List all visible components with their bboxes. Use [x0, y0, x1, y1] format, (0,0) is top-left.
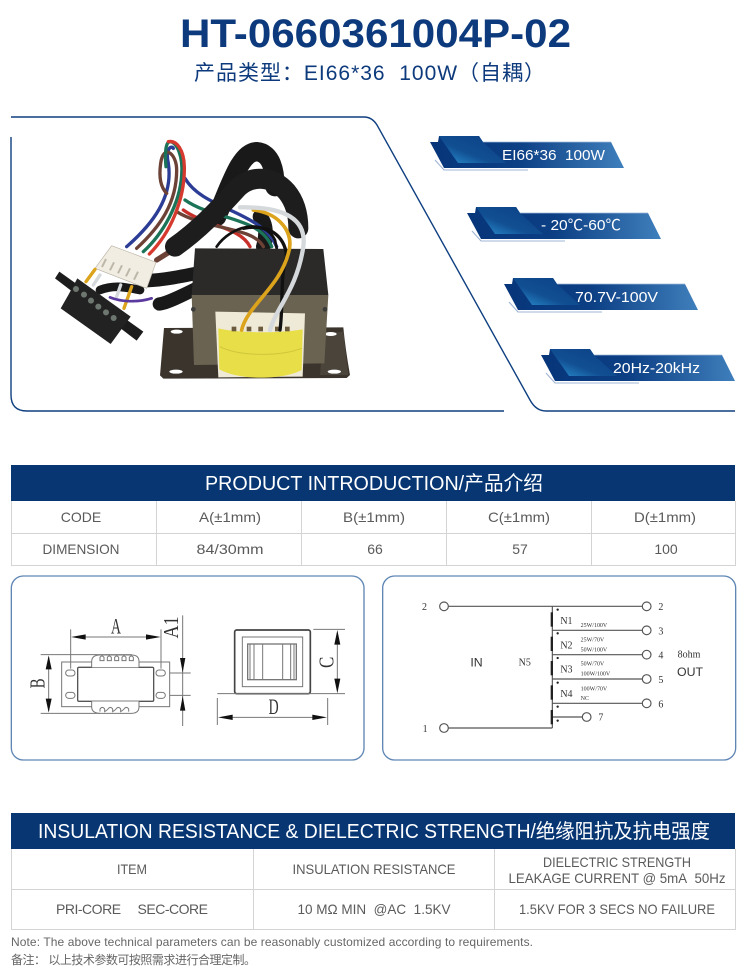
table row: headers: DIELECTRIC STRENGTH: [543, 854, 691, 870]
table row: values: 1.5KV FOR 3 SECS NO FAILURE: [519, 901, 715, 917]
title: HT-0660361004P-02: [180, 12, 571, 56]
schematic labels: N5: [519, 658, 531, 669]
schematic labels: N3: [560, 665, 573, 676]
table heading: [11, 813, 735, 849]
panel: dimension drawing: [11, 576, 364, 760]
product photo: transformer with wires: [55, 141, 350, 379]
schematic labels: 6: [658, 699, 663, 710]
table row: values: 10 MΩ MIN @AC 1.5KV: [298, 901, 451, 917]
table row: code: CODE: [61, 509, 101, 525]
schematic labels: N2: [560, 640, 573, 651]
schematic labels: 4: [658, 650, 663, 661]
spec tag: temperature: [467, 207, 661, 241]
note: Note: The above technical parameters can be reasonably customized according to requirements.: [11, 935, 533, 949]
schematic labels: 5: [658, 675, 663, 686]
table row: code: B(±1mm): [343, 509, 405, 525]
table row: dimension: 100: [654, 541, 678, 557]
schematic labels: 25W/100V: [581, 623, 608, 629]
icon: mounting plate: [160, 327, 350, 379]
table heading: INSULATION RESISTANCE & DIELECTRIC STRENGTH/绝缘阻抗及抗电强度: [38, 820, 710, 843]
insulation table: [11, 813, 736, 930]
icon: foam sleeves back: [100, 152, 275, 304]
top view drawing: A1: [161, 616, 183, 638]
schematic wires: [440, 602, 651, 732]
table row: headers: INSULATION RESISTANCE: [292, 861, 456, 877]
spec tag: frequency: 20Hz-20kHz: [613, 360, 700, 377]
top view drawing: B: [27, 678, 49, 688]
spec tag: EI66*36 100W: EI66*36 100W: [502, 147, 606, 164]
table heading: [11, 465, 735, 501]
icon: connector leads: [86, 269, 152, 308]
schematic labels: 100W/70V: [581, 686, 608, 692]
coil segments: [551, 608, 559, 724]
icon: coloured wires: [127, 141, 282, 273]
IN label: IN: [470, 655, 483, 669]
table row: headers: ITEM: [117, 861, 147, 877]
schematic labels: 3: [658, 626, 663, 637]
table row: dimension: [42, 541, 678, 557]
icon: foam sleeve front: [175, 179, 298, 247]
table heading: PRODUCT INTRODUCTION/产品介绍: [205, 472, 543, 495]
spec tag: temperature: - 20℃-60℃: [541, 217, 621, 234]
icon: white connector: [95, 246, 156, 288]
schematic labels: NC: [581, 696, 589, 702]
table row: dimension: 84/30mm: [196, 541, 264, 557]
schematic labels: 8ohm: [678, 649, 701, 660]
table row: headers: LEAKAGE CURRENT @ 5mA 50Hz: [508, 870, 726, 886]
table row: values: PRI-CORE SEC-CORE: [56, 901, 208, 917]
table row: values: [56, 901, 715, 917]
schematic labels: N4: [560, 689, 573, 700]
spec tag: voltage: [504, 278, 698, 312]
table row: dimension: 66: [367, 541, 383, 557]
OUT label: OUT: [677, 665, 703, 679]
table row: dimension: DIMENSION: [42, 541, 120, 557]
schematic labels: 7: [598, 713, 603, 724]
product introduction table: [11, 465, 736, 566]
table row: code: D(±1mm): [634, 509, 696, 525]
schematic labels: 2: [658, 602, 663, 613]
table row: code: A(±1mm): [199, 509, 261, 525]
schematic labels: 2: [422, 602, 427, 613]
icon: front wires: [240, 207, 304, 330]
spec tag: voltage: 70.7V-100V: [575, 289, 658, 306]
schematic labels: N1: [560, 616, 573, 627]
schematic labels: [422, 602, 701, 735]
top view drawing: A: [111, 613, 121, 638]
schematic labels: 1: [423, 724, 428, 735]
table row: headers: [117, 854, 726, 886]
product frame outline: [11, 117, 735, 411]
schematic labels: 25W/70V: [581, 638, 605, 644]
spec tag: frequency: [541, 349, 735, 383]
front view drawing: C: [316, 657, 338, 668]
front view drawing: D: [269, 694, 279, 719]
icon: black terminal block: [55, 272, 143, 344]
icon: yellow coil: [215, 312, 305, 378]
icon: transformer core: [191, 248, 328, 365]
table row: dimension: 57: [512, 541, 528, 557]
subtitle: 产品类型：EI66*36 100W（自耦）: [194, 62, 545, 85]
table row: code: [61, 509, 696, 525]
note: 备注： 以上技术参数可按照需求进行合理定制。: [11, 952, 256, 967]
top view drawing: [27, 613, 191, 726]
schematic labels: 50W/70V: [581, 662, 605, 668]
schematic labels: 100W/100V: [581, 672, 611, 678]
spec tag: EI66*36 100W: [430, 136, 624, 170]
table row: code: C(±1mm): [488, 509, 550, 525]
front view drawing: [217, 629, 345, 725]
schematic labels: 50W/100V: [581, 647, 608, 653]
panel: wiring schematic: [383, 576, 736, 760]
note: [11, 935, 533, 967]
